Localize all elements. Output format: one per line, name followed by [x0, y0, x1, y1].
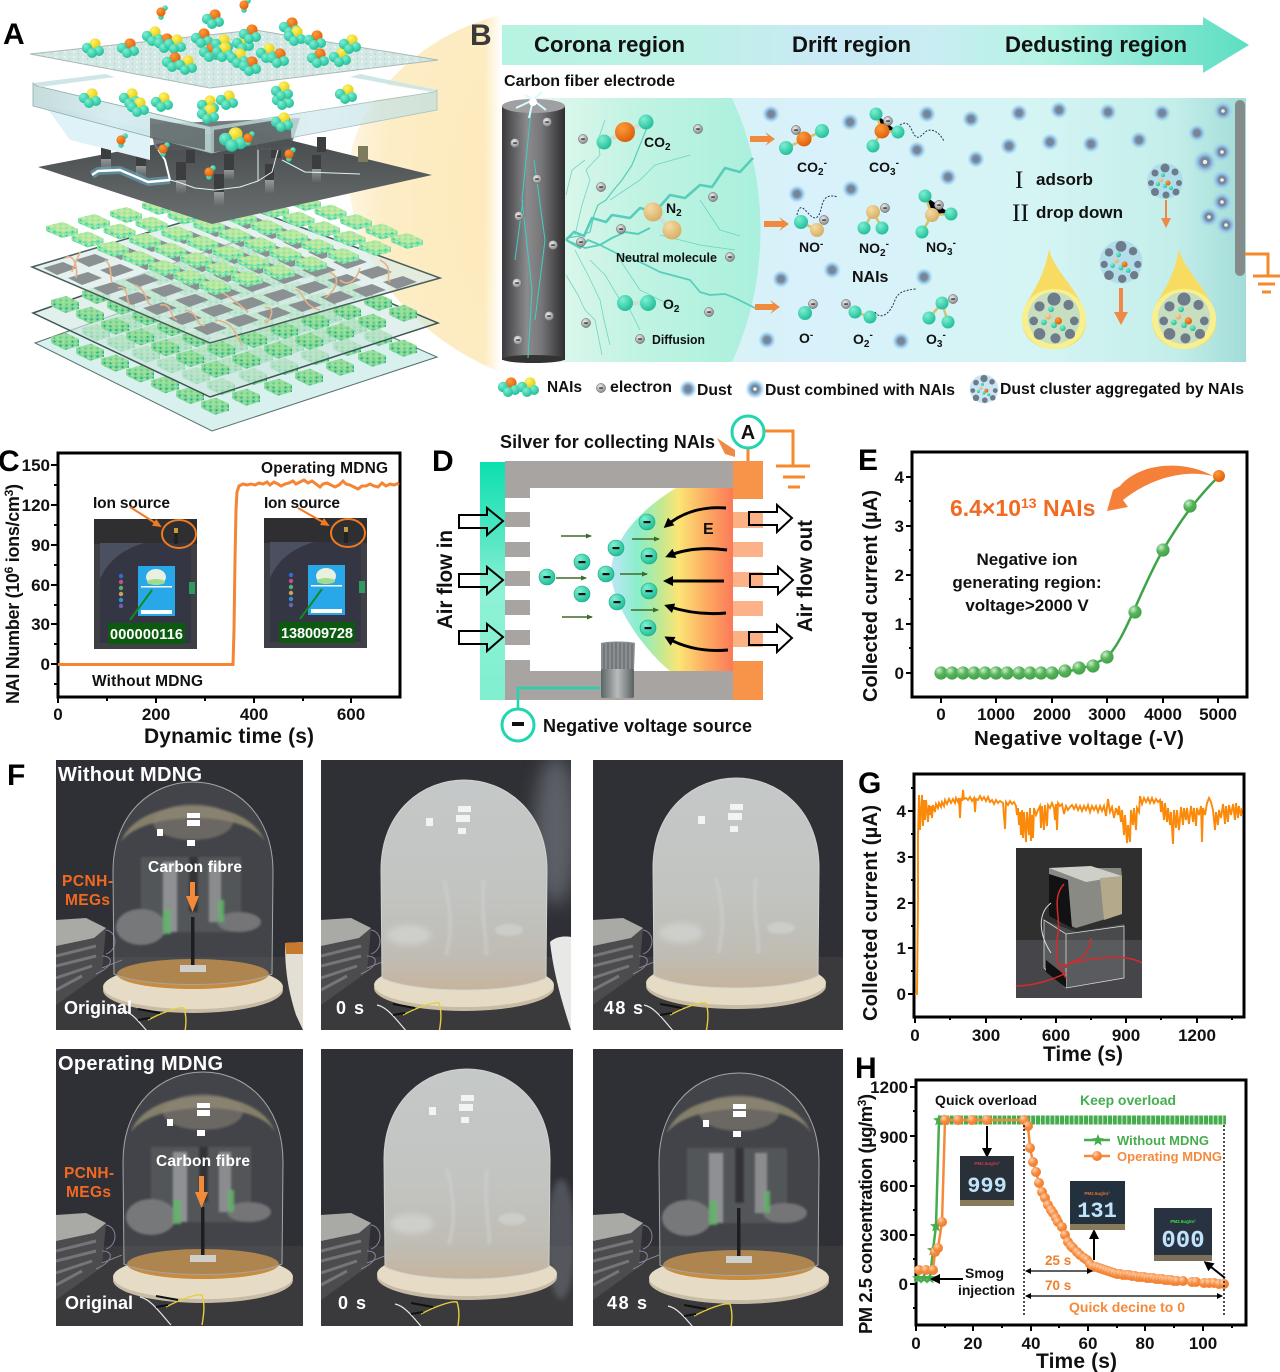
upper glass plate with electrode squares and wires — [32, 205, 440, 345]
y axis title: NAI Number (10 — [3, 573, 23, 704]
carbon fibre electrode cylinder — [502, 92, 565, 363]
panel D: ion generator schematic — [434, 416, 817, 741]
molecules inside frame — [79, 81, 357, 180]
halo connecting A to B — [349, 10, 501, 376]
photo: without MDNG 48 s — [593, 760, 843, 1030]
meter photo 999: PM2.5ug/m³ — [974, 1161, 1000, 1166]
label E: E — [858, 444, 878, 477]
ion labels — [797, 158, 956, 350]
x axis labels: 5000 — [1199, 705, 1237, 724]
photo captions row 2: Operating MDNG — [58, 1053, 223, 1075]
dedusting steps: drop down — [1036, 203, 1123, 222]
x axis labels: 600 — [337, 705, 365, 724]
x axis labels: 400 — [240, 705, 268, 724]
noisy current trace — [915, 790, 1242, 994]
silver collector tabs — [733, 461, 763, 700]
state labels: Without MDNG — [92, 673, 203, 690]
negative source label: Negative voltage source — [543, 716, 752, 736]
meter photo 999: 999 — [967, 1174, 1007, 1199]
y axis labels: 4 — [895, 468, 905, 487]
annotations — [935, 1092, 1185, 1315]
state labels: Operating MDNG — [261, 460, 388, 477]
lightning arcs on plate — [92, 130, 360, 190]
photo: operating MDNG 0 s — [321, 1049, 573, 1326]
legend: Dust — [697, 382, 732, 399]
ion labels: 3 — [947, 247, 953, 258]
x axis labels: 20 — [964, 1334, 982, 1353]
label F: F — [7, 759, 25, 792]
corona labels: N — [666, 200, 676, 216]
legend: Dust combined with NAIs — [765, 382, 955, 399]
meter photo 000: 000 — [1161, 1228, 1205, 1255]
x axis labels: 4000 — [1144, 705, 1182, 724]
corona labels: 2 — [676, 208, 682, 219]
label A: A — [3, 18, 25, 51]
state labels — [92, 460, 388, 690]
ion labels: O — [926, 331, 937, 347]
y axis labels: 0 — [897, 985, 906, 1004]
legend: Without MDNG — [1117, 1133, 1209, 1148]
inset photo: ion counter on — [264, 518, 367, 648]
legend — [498, 375, 1244, 403]
annotations: 70 s — [1045, 1278, 1071, 1293]
y axis labels — [22, 456, 50, 674]
region labels: Dedusting region — [1005, 32, 1187, 57]
region labels: Drift region — [792, 32, 911, 57]
x axis labels: 0 — [53, 705, 63, 724]
y axis labels: 900 — [880, 1128, 908, 1147]
ion labels: NAIs — [852, 269, 889, 286]
photo captions row 2: 48 s — [607, 1293, 647, 1313]
photo captions row 1: Carbon fibre — [148, 859, 242, 876]
label H: H — [855, 1052, 877, 1085]
photo captions row 2 — [58, 1053, 647, 1313]
x axis labels: 2000 — [1033, 705, 1071, 724]
x axis labels: 60 — [1079, 1334, 1097, 1353]
ion labels: NO — [859, 240, 880, 256]
photo captions row 1: 48 s — [604, 998, 643, 1018]
data curve — [941, 477, 1218, 673]
y axis labels: 1 — [897, 939, 906, 958]
carbon pillars — [101, 137, 368, 206]
dust particles — [758, 101, 1206, 350]
photo captions row 1: 0 s — [336, 998, 364, 1018]
ion labels: 2 — [864, 339, 870, 350]
ion labels: - — [810, 330, 813, 341]
ion labels: - — [896, 158, 899, 169]
NAIs callout: 6.4×10 — [950, 495, 1021, 521]
x axis labels — [910, 1026, 1216, 1045]
panel A: exploded device stack — [30, 0, 501, 431]
chamber background — [530, 98, 1246, 362]
y axis labels: 3 — [897, 848, 906, 867]
nanoparticles with ions near plate — [1193, 101, 1236, 235]
panel G: long-term current chart — [860, 774, 1244, 1066]
without MDNG trace — [918, 1120, 1226, 1278]
inset photo: ion counter off — [94, 519, 197, 649]
ion counter readouts: 138009728 — [281, 626, 353, 642]
lightning branches — [566, 120, 755, 355]
corona labels: Diffusion — [652, 332, 705, 347]
operating MDNG trace — [919, 1120, 1224, 1284]
annotations: Quick decine to 0 — [1069, 1299, 1185, 1315]
corona labels: CO — [644, 134, 665, 150]
axes — [51, 453, 400, 703]
label G: G — [858, 767, 881, 800]
x axis labels: 3000 — [1088, 705, 1126, 724]
photo: without MDNG original — [56, 760, 303, 1030]
axes — [906, 452, 1247, 703]
y axis labels — [895, 468, 905, 683]
ion labels: 2 — [880, 248, 886, 259]
x axis labels: 300 — [972, 1026, 1000, 1045]
photo: operating MDNG original — [56, 1049, 303, 1326]
glass frame — [33, 62, 437, 160]
y axis title: 3 — [855, 1099, 869, 1106]
guide lines and pointers — [933, 1125, 1225, 1315]
region note: voltage>2000 V — [965, 596, 1089, 615]
ion labels: - — [886, 239, 889, 250]
corona electrons — [510, 117, 735, 345]
panel E: current vs voltage chart — [860, 452, 1247, 750]
y axis labels: 0 — [895, 664, 904, 683]
x axis labels: 600 — [1042, 1026, 1070, 1045]
inset photo: device — [1016, 848, 1142, 998]
top perforated glass sheet — [30, 30, 438, 88]
meter photo 000: PM2.5ug/m³ — [1170, 1219, 1196, 1224]
dedusting steps: adsorb — [1036, 170, 1093, 189]
y axis labels: 60 — [31, 576, 50, 595]
grounded collecting electrode — [1235, 100, 1280, 292]
ion counter readouts: 000000116 — [110, 627, 183, 643]
curved orange callout arrow — [1107, 466, 1213, 511]
green sponge array — [46, 176, 423, 295]
x axis labels: 100 — [1189, 1334, 1217, 1353]
dotted trajectories — [797, 123, 944, 316]
ion labels: CO — [797, 159, 818, 175]
annotations: injection — [958, 1282, 1015, 1298]
electric field arrows — [666, 508, 728, 650]
meter photo 131: PM2.5ug/m³ — [1084, 1191, 1110, 1196]
meter photo 999 — [960, 1156, 1014, 1206]
x axis labels: 1000 — [977, 705, 1015, 724]
data curve — [58, 480, 399, 664]
x axis labels: 900 — [1112, 1026, 1140, 1045]
y axis labels: 0 — [41, 655, 50, 674]
corona labels: 2 — [674, 304, 680, 315]
x axis labels — [911, 1334, 1217, 1353]
middle glass plate with sponges — [33, 240, 438, 397]
annotations: Smog — [965, 1265, 1004, 1281]
y axis title: 3 — [2, 489, 16, 496]
meter photo 131: 131 — [1077, 1199, 1117, 1224]
panel C: NAI number chart — [2, 453, 400, 748]
air flow in label: Air flow in — [434, 530, 457, 629]
y axis title: ) — [3, 484, 23, 490]
highlighted end point — [1213, 470, 1225, 482]
y axis title: ) — [855, 1094, 876, 1100]
y axis labels: 30 — [31, 615, 50, 634]
ammeter and ground — [732, 416, 810, 487]
y axis labels: 90 — [31, 536, 50, 555]
region note: Negative ion — [976, 550, 1078, 569]
ion labels: - — [824, 158, 827, 169]
ions in chamber — [539, 514, 657, 636]
axes — [908, 774, 1244, 1023]
x axis labels: 1200 — [1178, 1026, 1216, 1045]
x axis labels: 40 — [1022, 1334, 1040, 1353]
y axis labels: 4 — [897, 802, 907, 821]
x axis labels: 0 — [911, 1334, 921, 1353]
x axis title: Time (s) — [1043, 1043, 1123, 1066]
carbon brush emitter — [601, 642, 635, 698]
bottom glass plate with sponges — [35, 270, 437, 431]
axes — [910, 1080, 1246, 1331]
y axis labels: 2 — [897, 894, 906, 913]
y axis labels: 3 — [895, 517, 904, 536]
region arrow band — [502, 17, 1249, 73]
ion labels: - — [953, 238, 956, 249]
photo captions row 1 — [58, 764, 643, 1018]
negative air ions — [779, 108, 958, 328]
y axis labels: 1200 — [870, 1078, 908, 1097]
y axis labels: 300 — [880, 1226, 908, 1245]
meter photo 000 — [1154, 1208, 1212, 1261]
y axis labels: 600 — [880, 1177, 908, 1196]
dedusting steps — [1012, 167, 1123, 227]
teal inlet bar — [480, 462, 505, 700]
photo captions row 1: PCNH- — [62, 873, 113, 890]
ion source annotations — [93, 495, 365, 548]
x axis labels — [53, 705, 365, 724]
neutral molecules — [596, 114, 682, 311]
small drift arrows — [556, 536, 659, 617]
panel H: PM2.5 concentration chart — [855, 1078, 1246, 1372]
ion labels: CO — [869, 159, 890, 175]
legend: electron — [610, 379, 672, 396]
ion source annotations: Ion source — [93, 495, 170, 512]
ion labels: NO — [799, 239, 820, 255]
ion labels: - — [942, 330, 946, 341]
y axis labels — [897, 802, 907, 1004]
annotations: Keep overload — [1080, 1092, 1176, 1108]
x axis title: Dynamic time (s) — [144, 725, 314, 748]
x axis labels: 0 — [936, 705, 946, 724]
ion labels: - — [820, 239, 823, 250]
negative source wire and terminal — [502, 688, 600, 741]
ion labels: 2 — [818, 167, 824, 178]
panel F: smog chamber photos — [56, 755, 853, 1334]
y axis labels — [870, 1078, 908, 1294]
x axis labels: 200 — [142, 705, 170, 724]
region note: generating region: — [952, 573, 1102, 592]
x axis title: Negative voltage (-V) — [974, 727, 1184, 750]
electrode caption: Carbon fiber electrode — [504, 73, 675, 90]
air flow arrows — [459, 505, 793, 652]
ion labels: NO — [926, 239, 947, 255]
y axis labels: 2 — [895, 566, 904, 585]
panel B: region diagram — [498, 17, 1280, 403]
y axis title: Collected current (µA) — [860, 805, 882, 1021]
dust clusters and drops — [1022, 163, 1216, 349]
label B: B — [470, 19, 492, 52]
photo captions row 2: MEGs — [66, 1184, 111, 1201]
corona bulge — [530, 98, 760, 362]
NAIs callout: 13 — [1021, 495, 1037, 511]
legend: NAIs — [547, 379, 582, 396]
NAIs callout: NAIs — [1037, 495, 1095, 521]
x axis labels: 80 — [1136, 1334, 1154, 1353]
photo captions row 2: PCNH- — [64, 1165, 114, 1182]
photo captions row 2: 0 s — [338, 1293, 366, 1313]
y axis labels: 120 — [22, 496, 50, 515]
corona labels: 2 — [665, 142, 671, 153]
y axis title: PM 2.5 concentration (µg/m — [855, 1106, 876, 1334]
air flow out label: Air flow out — [794, 520, 817, 632]
ammeter and ground: A — [741, 422, 755, 444]
ion counter readouts — [108, 589, 355, 644]
photo: without MDNG 0 s — [321, 760, 571, 1030]
y axis labels: 1 — [895, 615, 904, 634]
label D: D — [432, 445, 454, 478]
photo captions row 2: Original — [65, 1293, 133, 1313]
field label: E — [703, 521, 714, 538]
ion labels: - — [869, 330, 873, 341]
ion source annotations: Ion source — [264, 495, 340, 512]
annotations: 25 s — [1045, 1253, 1071, 1268]
ion labels: 3 — [937, 339, 943, 350]
x axis labels: 0 — [910, 1026, 920, 1045]
legend: Dust cluster aggregated by NAIs — [1000, 381, 1244, 398]
annotations: Quick overload — [935, 1092, 1037, 1108]
corona labels — [616, 134, 717, 347]
y axis labels: 0 — [899, 1275, 908, 1294]
region note — [952, 550, 1102, 615]
electric field gradient — [611, 488, 733, 671]
y axis title: ions/cm — [3, 496, 23, 567]
y axis title: Collected current (µA) — [860, 490, 882, 702]
ion labels: O — [853, 331, 864, 347]
chamber frame — [505, 461, 733, 700]
dark electrode plate — [38, 128, 432, 224]
legend: Operating MDNG — [1117, 1149, 1222, 1164]
molecules above sheet — [82, 0, 361, 76]
corona labels: O — [663, 296, 674, 312]
photo: operating MDNG 48 s — [593, 1049, 843, 1326]
x axis labels — [936, 705, 1237, 724]
photo captions row 1: Original — [64, 998, 132, 1018]
ion labels: O — [799, 330, 810, 346]
photo captions row 1: Without MDNG — [58, 764, 202, 786]
dedusting steps: I — [1015, 167, 1023, 194]
photo captions row 2: Carbon fibre — [156, 1153, 250, 1170]
region labels: Corona region — [534, 32, 685, 57]
region labels — [534, 32, 1187, 57]
y axis labels: 150 — [22, 456, 50, 475]
orange flow arrows — [750, 132, 789, 314]
photo captions row 1: MEGs — [65, 892, 110, 909]
legend — [1084, 1133, 1222, 1164]
corona labels: Neutral molecule — [616, 250, 717, 265]
meter photo 131 — [1070, 1181, 1125, 1230]
silver label and pointer: Silver for collecting NAIs — [500, 432, 715, 452]
y axis title: 6 — [2, 566, 16, 573]
ion labels: 3 — [890, 167, 896, 178]
dedusting steps: II — [1012, 200, 1029, 227]
